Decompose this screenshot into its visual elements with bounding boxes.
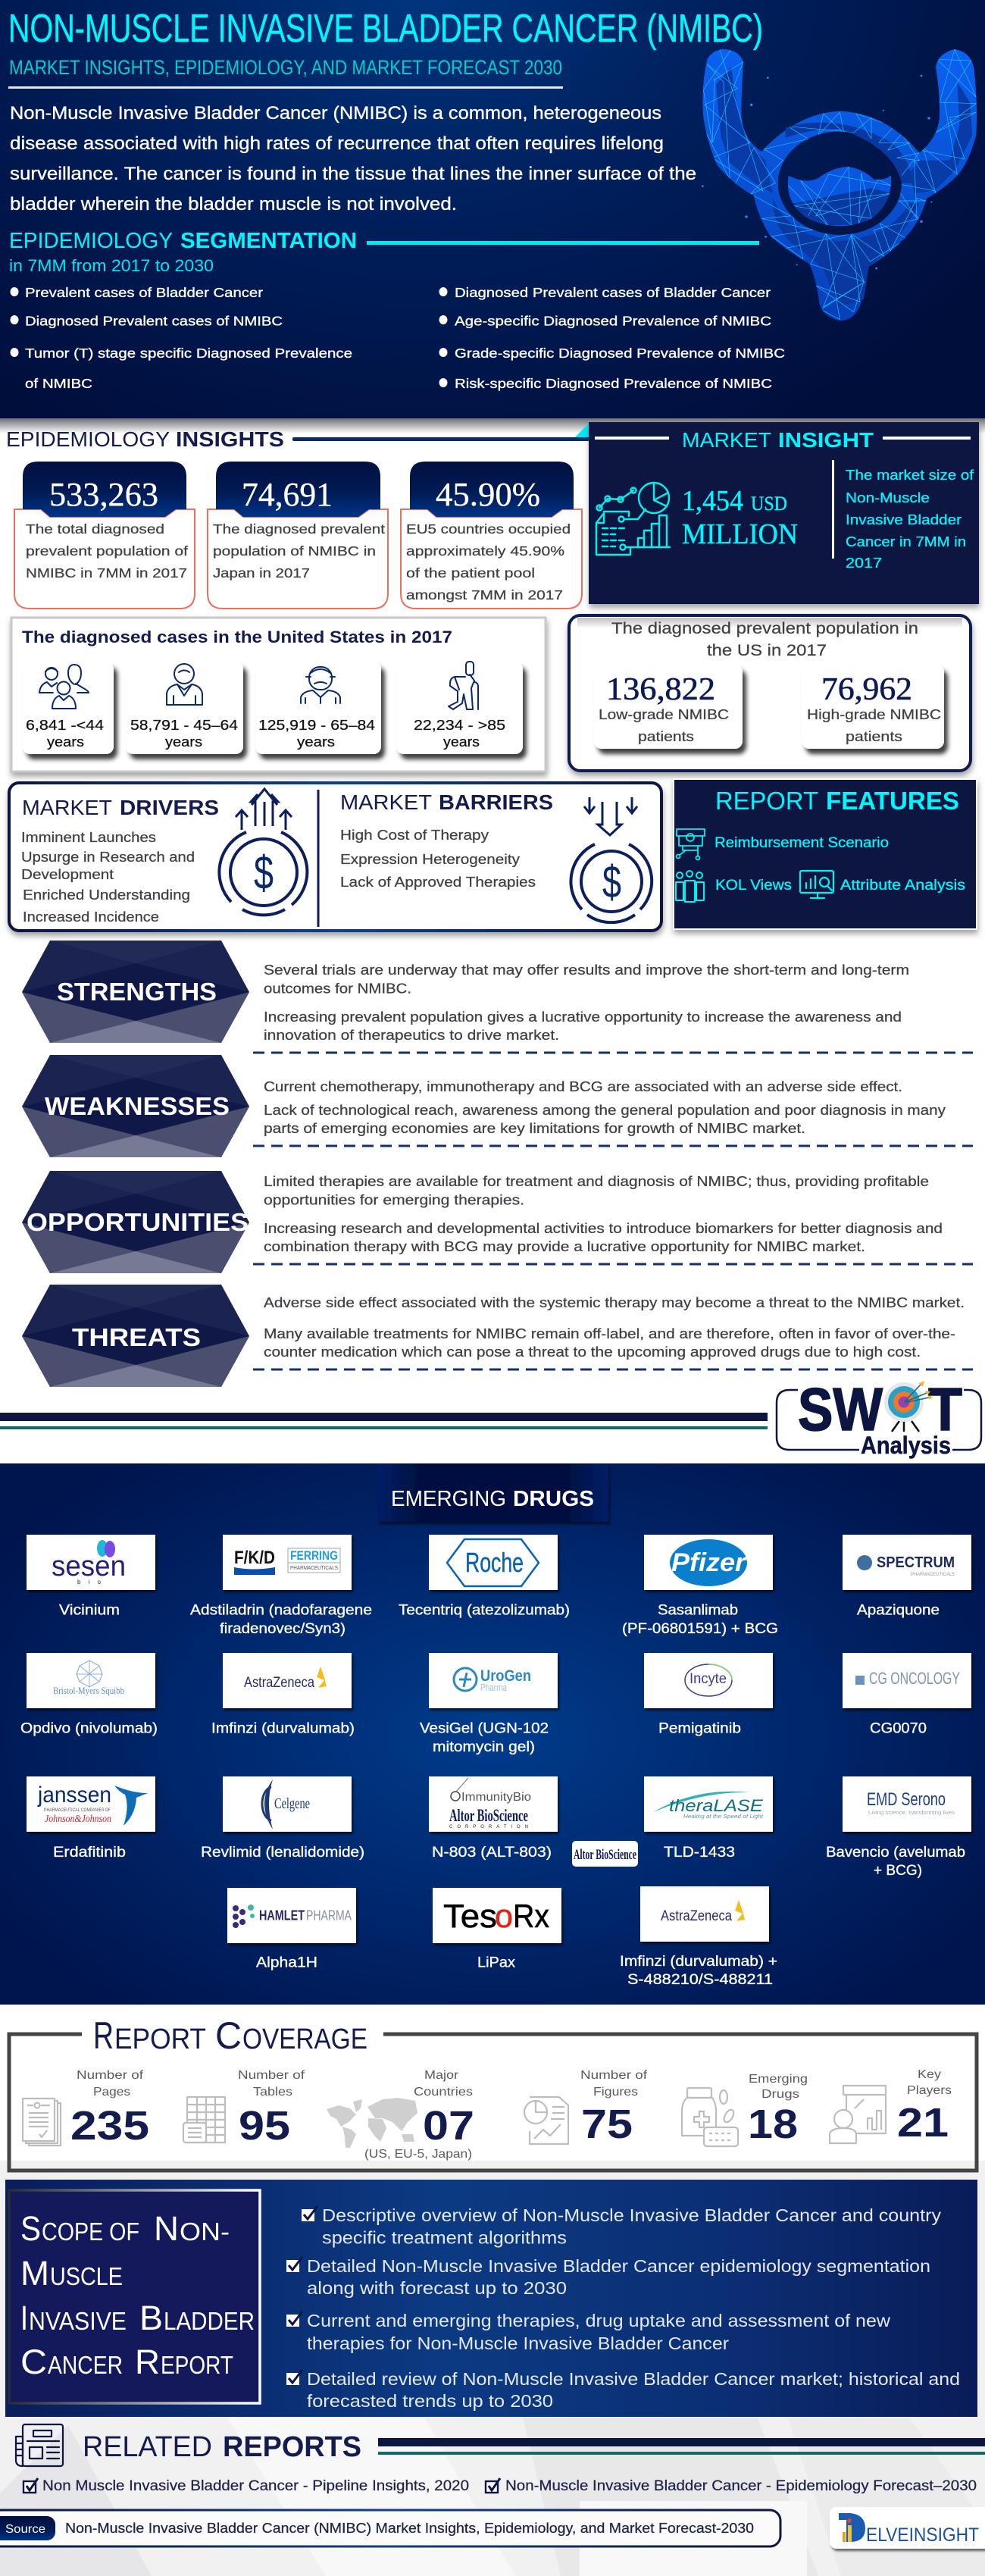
stat: major countries: 07	[423, 2103, 474, 2149]
drug: CG0070	[843, 1653, 971, 1737]
drug: Bavencio: + BCG)	[874, 1863, 922, 1879]
text: weaknesses: Lack of technological reach, awareness among the general population and poor diagnosis in many	[264, 1103, 946, 1118]
segmentation bullet list: Diagnosed Prevalent cases of Bladder Cancer	[455, 285, 771, 300]
badge: opportunities: OPPORTUNITIES	[27, 1208, 249, 1236]
scope title box: S	[20, 2209, 41, 2248]
text: strengths: Several trials are underway that may offer results and improve the short-term and long-term	[264, 962, 909, 978]
panel: stat card 533,263: NMIBC in 7MM in 2017	[26, 565, 187, 581]
segmentation bullet list: Prevalent cases of Bladder Cancer	[25, 285, 263, 300]
icon: market chart and document	[596, 483, 670, 555]
age card: 65 to 84	[255, 662, 381, 754]
heading: report coverage: R	[93, 2014, 114, 2057]
drug: VesiGel: VesiGel (UGN-102	[420, 1720, 549, 1737]
market barriers: Lack of Approved Therapies	[340, 875, 536, 890]
heading: epidemiology segmentation: in 7MM from 2017 to 2030	[9, 256, 214, 275]
panel: stat card 45.90%: EU5 countries occupied	[406, 521, 571, 537]
logo: SWOT analysis: SW	[798, 1376, 883, 1443]
drug: CG0070: CG0070	[870, 1720, 927, 1737]
card: high-grade NMIBC: 76,962	[821, 672, 912, 707]
market size value: 1,454	[682, 485, 743, 517]
drug: TLD-1433: theraLASE	[669, 1796, 763, 1815]
related report 1: Non Muscle Invasive Bladder Cancer - Pipeline Insights, 2020	[42, 2478, 469, 2494]
drug: Tecentriq: Tecentriq (atezolizumab)	[399, 1602, 570, 1619]
drug: Sasanlimab: Pfizer	[671, 1548, 747, 1577]
drug: Apaziquone	[843, 1535, 971, 1619]
logo: DelveInsight	[830, 2507, 985, 2549]
market drivers: $	[254, 847, 274, 900]
stat: tables: Tables	[253, 2086, 292, 2099]
stat: pages: Pages	[93, 2086, 130, 2099]
drug: Sasanlimab: (PF-06801591) + BCG	[622, 1621, 778, 1637]
heading: emerging drugs: DRUGS	[513, 1487, 594, 1511]
heading: epidemiology segmentation: SEGMENTATION	[180, 229, 357, 253]
drug: Erdafitinib: PHARMACEUTICAL COMPANIES OF	[44, 1808, 111, 1813]
drug: Imfinzi: Imfinzi (durvalumab)	[211, 1720, 355, 1737]
scope item 1: specific treatment algorithms	[322, 2228, 567, 2248]
drug: Imfinzi: AstraZeneca	[244, 1675, 314, 1691]
label: reimbursement scenario: Reimbursement Scenario	[715, 835, 889, 851]
market size text: 2017	[846, 555, 882, 571]
drug: Vicinium: Vicinium	[59, 1602, 120, 1619]
stat: major countries: Countries	[414, 2086, 473, 2099]
text: opportunities: opportunities for emerging therapies.	[264, 1193, 524, 1208]
segmentation bullet list: Risk-specific Diagnosed Prevalence of NMIBC	[455, 376, 772, 391]
panel: stat card 533,263: 533,263	[49, 476, 158, 513]
drug: TLD-1433	[644, 1776, 773, 1861]
drug: Adstiladrin: FERRING	[290, 1548, 338, 1563]
card: high-grade NMIBC: patients	[846, 729, 902, 744]
heading: epidemiology segmentation	[9, 229, 759, 275]
age card: over 85	[396, 662, 523, 754]
market size text: The market size of	[846, 467, 974, 483]
market drivers: Development	[21, 867, 114, 882]
panel: SWOT weaknesses	[22, 1055, 946, 1157]
age card: under 44: 6,841 -<44	[26, 718, 104, 733]
drug: Pemigatinib: Incyte	[690, 1671, 727, 1687]
scope title box: ON-	[180, 2218, 230, 2246]
drug: Adstiladrin	[190, 1535, 372, 1637]
drug: Adstiladrin: firadenovec/Syn3)	[220, 1621, 346, 1637]
stat: figures: Figures	[593, 2086, 638, 2099]
market drivers: Upsurge in Research and	[21, 850, 195, 865]
stat: figures: 75	[581, 2102, 633, 2147]
panel: related reports	[16, 2424, 985, 2494]
intro paragraph: bladder wherein the bladder muscle is not involved.	[10, 194, 457, 214]
stat: figures: Number of	[580, 2069, 648, 2082]
age card: over 85: years	[443, 734, 480, 750]
badge: weaknesses: WEAKNESSES	[45, 1092, 230, 1120]
drug: Erdafitinib: Johnson&Johnson	[45, 1814, 111, 1825]
badge: threats: THREATS	[72, 1323, 201, 1351]
market drivers: MARKET	[22, 796, 112, 819]
panel: stat card 533,263: prevalent population of	[26, 543, 188, 559]
age card: 65 to 84: years	[297, 734, 335, 750]
icon: world map	[327, 2098, 417, 2148]
heading: report coverage	[93, 2014, 367, 2057]
stat: tables: 95	[239, 2103, 290, 2149]
drug: LiPax: o	[495, 1898, 513, 1935]
title: NON-MUSCLE INVASIVE BLADDER CANCER (NMIBC)	[8, 7, 763, 51]
stat: key players: Key	[918, 2068, 941, 2081]
drug: LiPax	[433, 1888, 561, 1970]
age card: 65 to 84: 125,919 - 65–84	[258, 718, 375, 733]
scope title box: C	[20, 2343, 47, 2381]
drug: TLD-1433: Healing at the Speed of Light	[683, 1814, 764, 1820]
market size value: USD	[751, 493, 787, 515]
scope title box: NVASIVE	[29, 2307, 127, 2335]
card: high-grade NMIBC: High-grade NMIBC	[807, 707, 941, 722]
drug: Apaziquone: PHARMACEUTICALS	[911, 1573, 955, 1577]
drug: Bavencio: EMD Serono	[867, 1789, 946, 1810]
market drivers: DRIVERS	[120, 796, 219, 819]
drug: Alpha1H: HAMLET	[259, 1908, 305, 1923]
segmentation bullet list: Age-specific Diagnosed Prevalence of NMIBC	[455, 314, 771, 329]
heading: report coverage: OVERAGE	[242, 2024, 367, 2055]
heading: market insight: INSIGHT	[778, 428, 874, 452]
heading: market insight: MARKET	[682, 428, 771, 452]
logo: Altor BioScience small	[572, 1841, 638, 1867]
stat: emerging drugs: 18	[748, 2102, 798, 2147]
panel: emerging drugs	[0, 1463, 985, 2005]
scope item 3: therapies for Non-Muscle Invasive Bladder Cancer	[307, 2333, 729, 2353]
drug: Revlimid	[201, 1776, 364, 1861]
intro paragraph: disease associated with high rates of recurrence that often requires lifelong	[10, 133, 664, 154]
heading: related reports: RELATED	[83, 2431, 212, 2463]
drug: Imfinzi combination: Imfinzi (durvalumab) +	[620, 1954, 777, 1970]
panel: hero header	[0, 0, 985, 418]
stat: pages	[23, 2069, 149, 2149]
panel: stat card 533,263: The total diagnosed	[26, 521, 164, 537]
panel: market insight	[589, 422, 979, 604]
drug: Imfinzi combination	[620, 1886, 777, 1988]
badge: strengths	[22, 941, 249, 1043]
drug: LiPax: LiPax	[477, 1955, 516, 1970]
label: attribute analysis: Attribute Analysis	[840, 878, 965, 894]
panel: stat card 74,691: Japan in 2017	[213, 565, 310, 581]
age card: 45 to 64: years	[165, 734, 202, 750]
drug: Alpha1H: PHARMA	[306, 1908, 352, 1923]
scope item 4: Detailed review of Non-Muscle Invasive Bladder Cancer market; historical and	[307, 2369, 960, 2389]
panel: report coverage	[9, 2014, 977, 2171]
market drivers: Imminent Launches	[21, 830, 156, 845]
badge: threats	[22, 1285, 249, 1387]
source bar	[0, 2510, 780, 2546]
logo: SWOT analysis: T	[928, 1376, 962, 1443]
market barriers	[340, 790, 652, 922]
drug: Pemigatinib	[644, 1653, 773, 1737]
stat: major countries: Major	[424, 2069, 459, 2082]
scope title box	[9, 2190, 260, 2403]
heading: epidemiology insights: INSIGHTS	[176, 427, 284, 451]
text: opportunities	[264, 1174, 943, 1254]
scope title box: COPE OF	[42, 2218, 139, 2246]
drug: N-803: CORPORATION	[449, 1825, 528, 1829]
drug: Vicinium: sesen	[52, 1551, 126, 1582]
source pill: Source	[5, 2523, 45, 2536]
drug: Apaziquone: Apaziquone	[857, 1602, 940, 1619]
drug: N-803: Altor BioScience	[449, 1806, 528, 1825]
panel: SWOT strengths	[22, 941, 909, 1043]
scope item 2	[286, 2256, 930, 2298]
scope item 1: Descriptive overview of Non-Muscle Invasive Bladder Cancer and country	[322, 2205, 942, 2225]
heading: US population: the US in 2017	[707, 642, 827, 659]
stat: major countries: (US, EU-5, Japan)	[364, 2148, 472, 2161]
drug: Opdivo: Bristol-Myers Squibb	[53, 1685, 124, 1696]
market drivers: Enriched Understanding	[23, 887, 190, 903]
drug: Erdafitinib: Erdafitinib	[53, 1845, 126, 1861]
heading: report coverage: C	[215, 2014, 242, 2057]
drug: Adstiladrin: F/K/D	[234, 1548, 275, 1568]
panel: stat card 45.90%	[401, 462, 582, 609]
intro paragraph: Non-Muscle Invasive Bladder Cancer (NMIBC) is a common, heterogeneous	[10, 103, 661, 124]
stat: emerging drugs: Drugs	[761, 2088, 799, 2101]
age card: over 85: 22,234 - >85	[414, 718, 505, 733]
heading: emerging drugs	[377, 1463, 608, 1522]
card: low-grade NMIBC	[594, 665, 743, 749]
market size text: Invasive Bladder	[846, 512, 962, 527]
drug: LiPax: Tes	[443, 1898, 497, 1935]
badge: opportunities	[22, 1171, 249, 1273]
drug: Alpha1H: Alpha1H	[256, 1955, 317, 1970]
card: low-grade NMIBC: patients	[638, 729, 694, 744]
stat: key players: Players	[907, 2084, 952, 2097]
badge: weaknesses	[22, 1055, 249, 1157]
scope title box: N	[154, 2209, 179, 2248]
drug: Opdivo	[20, 1653, 158, 1737]
text: threats: Many available treatments for NMIBC remain off-label, and are therefore, often in favor of over-the-	[264, 1326, 955, 1341]
market barriers: $	[602, 856, 621, 907]
icon: newspaper	[16, 2424, 63, 2466]
drug: Adstiladrin: PHARMACEUTICALS	[290, 1566, 338, 1571]
drug: Adstiladrin: Adstiladrin (nadofaragene	[190, 1602, 372, 1619]
text: threats: Adverse side effect associated with the systemic therapy may become a threat to the NMIBC market.	[264, 1295, 965, 1310]
text: strengths: innovation of therapeutics to drive market.	[264, 1028, 559, 1043]
card: low-grade NMIBC: Low-grade NMIBC	[599, 707, 729, 722]
age card: 45 to 64	[126, 662, 243, 754]
drug: Imfinzi combination: AstraZeneca	[661, 1908, 732, 1924]
scope title box: LADDER	[164, 2307, 255, 2335]
scope title box: USCLE	[50, 2262, 123, 2290]
intro paragraph	[10, 103, 696, 214]
logo: SWOT analysis	[777, 1376, 981, 1459]
text: threats: counter medication which can pose a threat to the upcoming approved drugs due to high cost.	[264, 1344, 921, 1360]
text: opportunities: combination therapy with BCG may provide a lucrative opportunity for NMIBC market.	[264, 1239, 865, 1254]
drug: Sasanlimab	[622, 1535, 778, 1637]
panel: stat card 45.90%: amongst 7MM in 2017	[406, 587, 563, 603]
scope item 4	[286, 2369, 960, 2411]
heading: epidemiology insights	[6, 423, 592, 451]
segmentation bullet list	[11, 285, 785, 391]
icon: attribute analysis	[800, 871, 833, 898]
text: opportunities: Increasing research and developmental activities to introduce biomarkers for better diagnosis and	[264, 1221, 943, 1236]
text: strengths: Increasing prevalent population gives a lucrative opportunity to increase the awareness and	[264, 1009, 902, 1025]
panel: stat card 45.90%: approximately 45.90%	[406, 543, 564, 559]
drug: Vicinium: b i o	[77, 1579, 102, 1585]
scope title box: M	[20, 2254, 49, 2293]
heading: US population: The diagnosed prevalent population in	[611, 620, 918, 637]
drug: N-803: ImmunityBio	[461, 1791, 531, 1804]
market size value	[682, 485, 798, 550]
market barriers: Expression Heterogeneity	[340, 852, 520, 867]
heading: epidemiology insights: EPIDEMIOLOGY	[6, 427, 170, 451]
drug: TLD-1433: TLD-1433	[664, 1845, 735, 1861]
icon: archery target	[884, 1381, 933, 1432]
text: opportunities: Limited therapies are available for treatment and diagnosis of NMIBC; thus, providing profitable	[264, 1174, 929, 1189]
market size text: Cancer in 7MM in	[846, 534, 966, 549]
shadow below hero	[0, 418, 985, 434]
heading: report features: REPORT	[715, 787, 818, 815]
drug: VesiGel: UroGen	[480, 1667, 531, 1685]
scope item 1	[302, 2205, 942, 2248]
heading: epidemiology segmentation: EPIDEMIOLOGY	[9, 229, 173, 253]
drug: Imfinzi combination: S-488210/S-488211	[627, 1972, 773, 1988]
source text: Non-Muscle Invasive Bladder Cancer (NMIBC) Market Insights, Epidemiology, and Market Forecast-2030	[65, 2521, 754, 2536]
scope item 3	[286, 2311, 890, 2353]
drug: N-803	[429, 1776, 558, 1861]
panel: market drivers and barriers	[9, 783, 661, 931]
drug: Bavencio	[826, 1776, 971, 1879]
card: low-grade NMIBC: 136,822	[606, 672, 715, 707]
text: weaknesses: parts of emerging economies are key limitations for growth of NMIBC market.	[264, 1121, 805, 1136]
drug: VesiGel: Pharma	[480, 1682, 508, 1693]
panel: stat card 74,691: The diagnosed prevalent	[213, 521, 385, 537]
market barriers: BARRIERS	[439, 790, 553, 814]
drug: Tecentriq: Roche	[465, 1547, 524, 1578]
heading: US population	[611, 620, 918, 659]
age card: 45 to 64: 58,791 - 45–64	[130, 718, 238, 733]
scope title box: I	[20, 2299, 28, 2337]
source pill	[0, 2516, 55, 2540]
segmentation bullet list: of NMIBC	[25, 376, 92, 391]
card: high-grade NMIBC	[802, 665, 944, 749]
heading: related reports: REPORTS	[223, 2431, 361, 2463]
market size text	[846, 467, 974, 571]
panel: stat card 74,691: 74,691	[242, 476, 333, 513]
drug: Opdivo: Opdivo (nivolumab)	[20, 1720, 158, 1737]
market drivers: Increased Incidence	[23, 909, 159, 925]
stat: emerging drugs	[682, 2073, 808, 2147]
market size text: Non-Muscle	[846, 490, 930, 505]
market size value: MILLION	[682, 518, 798, 550]
panel: report features	[674, 779, 977, 929]
segmentation bullet list: Diagnosed Prevalent cases of NMIBC	[25, 314, 283, 329]
text: strengths	[264, 962, 909, 1043]
scope item 3: Current and emerging therapies, drug uptake and assessment of new	[307, 2311, 890, 2330]
heading: report coverage: EPORT	[114, 2024, 206, 2055]
segmentation bullet list: Grade-specific Diagnosed Prevalence of NMIBC	[455, 346, 785, 361]
scope item 4: forecasted trends up to 2030	[307, 2391, 553, 2411]
panel: SWOT threats	[22, 1285, 965, 1387]
drug: Imfinzi	[211, 1653, 355, 1737]
drug: Tecentriq	[399, 1535, 570, 1619]
drug: Pemigatinib: Pemigatinib	[658, 1720, 741, 1737]
drug: Bavencio: Living science, transforming lives	[868, 1811, 955, 1816]
drug: Revlimid: Revlimid (lenalidomide)	[201, 1845, 364, 1861]
panel: stat card 74,691: population of NMIBC in	[213, 543, 376, 559]
intro paragraph: surveillance. The cancer is found in the tissue that lines the inner surface of the	[10, 164, 696, 184]
icon: coin with falling arrows	[571, 797, 652, 922]
logo: SWOT analysis: Analysis	[861, 1432, 951, 1459]
label: KOL views: KOL Views	[715, 878, 792, 894]
panel: diagnosed prevalent population in the US	[569, 615, 971, 771]
stat: key players: 21	[897, 2100, 949, 2146]
background: laptop watermark	[0, 2161, 985, 2576]
stat: tables	[183, 2069, 305, 2149]
drug: LiPax: Rx	[513, 1898, 549, 1935]
icon: reimbursement	[676, 829, 705, 859]
panel: stat card 45.90%: of the patient pool	[406, 565, 535, 581]
scope title box: EPORT	[161, 2351, 233, 2379]
panel: stat card 533,263	[14, 462, 195, 609]
badge: strengths: STRENGTHS	[57, 978, 217, 1006]
heading: related reports	[83, 2431, 361, 2463]
drug: N-803: N-803 (ALT-803)	[432, 1845, 552, 1861]
logo: Altor BioScience small: Altor BioScience	[574, 1847, 636, 1863]
panel: stat card 45.90%: 45.90%	[436, 476, 540, 513]
drug: Apaziquone: SPECTRUM	[877, 1554, 955, 1571]
related report 2: Non-Muscle Invasive Bladder Cancer - Epidemiology Forecast–2030	[505, 2478, 977, 2494]
panel: stat card 74,691	[208, 462, 388, 609]
age card: under 44	[23, 662, 114, 754]
subtitle: MARKET INSIGHTS, EPIDEMIOLOGY, AND MARKET FORECAST 2030	[9, 56, 562, 79]
drug: Vicinium	[27, 1535, 155, 1619]
stat: pages: Number of	[77, 2069, 144, 2082]
scope title box: R	[135, 2343, 160, 2381]
drug: VesiGel: mitomycin gel)	[433, 1739, 535, 1755]
drug: Erdafitinib: janssen	[37, 1783, 111, 1808]
scope title box: ANCER	[48, 2351, 123, 2379]
stat: emerging drugs: Emerging	[749, 2073, 808, 2086]
market barriers: High Cost of Therapy	[340, 828, 489, 843]
stat: pages: 235	[70, 2103, 149, 2149]
stat: tables: Number of	[238, 2069, 305, 2082]
market drivers	[21, 789, 307, 925]
drug: Erdafitinib	[27, 1776, 155, 1861]
drug: Revlimid: Celgene	[274, 1795, 310, 1812]
panel: diagnosed cases in the United States	[11, 618, 546, 772]
panel: SWOT opportunities	[22, 1171, 943, 1273]
icon: bladder illustration	[702, 49, 977, 321]
icon: KOL views	[676, 871, 704, 902]
icon: coin with rising arrows	[219, 789, 307, 915]
text: strengths: outcomes for NMIBC.	[264, 981, 411, 996]
segmentation bullet list: Tumor (T) stage specific Diagnosed Prevalence	[25, 346, 352, 361]
text: weaknesses	[264, 1079, 946, 1136]
drug: VesiGel	[420, 1653, 558, 1755]
panel: scope of report	[5, 2180, 977, 2417]
heading: US cases: The diagnosed cases in the United States in 2017	[22, 628, 452, 646]
scope item 2: along with forecast up to 2030	[307, 2278, 567, 2298]
heading: report features: FEATURES	[826, 787, 959, 815]
market barriers: MARKET	[340, 790, 432, 814]
drug: Bavencio: Bavencio (avelumab	[826, 1845, 965, 1861]
scope title box: B	[139, 2299, 163, 2337]
heading: emerging drugs: EMERGING	[391, 1487, 506, 1511]
drug: Alpha1H	[227, 1888, 356, 1970]
drug: Sasanlimab: Sasanlimab	[658, 1602, 738, 1619]
text: threats	[264, 1295, 965, 1360]
heading: report features	[715, 787, 959, 815]
text: weaknesses: Current chemotherapy, immunotherapy and BCG are associated with an adverse side effect.	[264, 1079, 902, 1094]
stat: major countries	[327, 2069, 474, 2161]
scope item 2: Detailed Non-Muscle Invasive Bladder Cancer epidemiology segmentation	[307, 2256, 930, 2276]
stat: figures	[524, 2069, 648, 2147]
heading: market insight	[595, 428, 971, 452]
age card: under 44: years	[47, 734, 84, 750]
stat: key players	[830, 2068, 952, 2146]
